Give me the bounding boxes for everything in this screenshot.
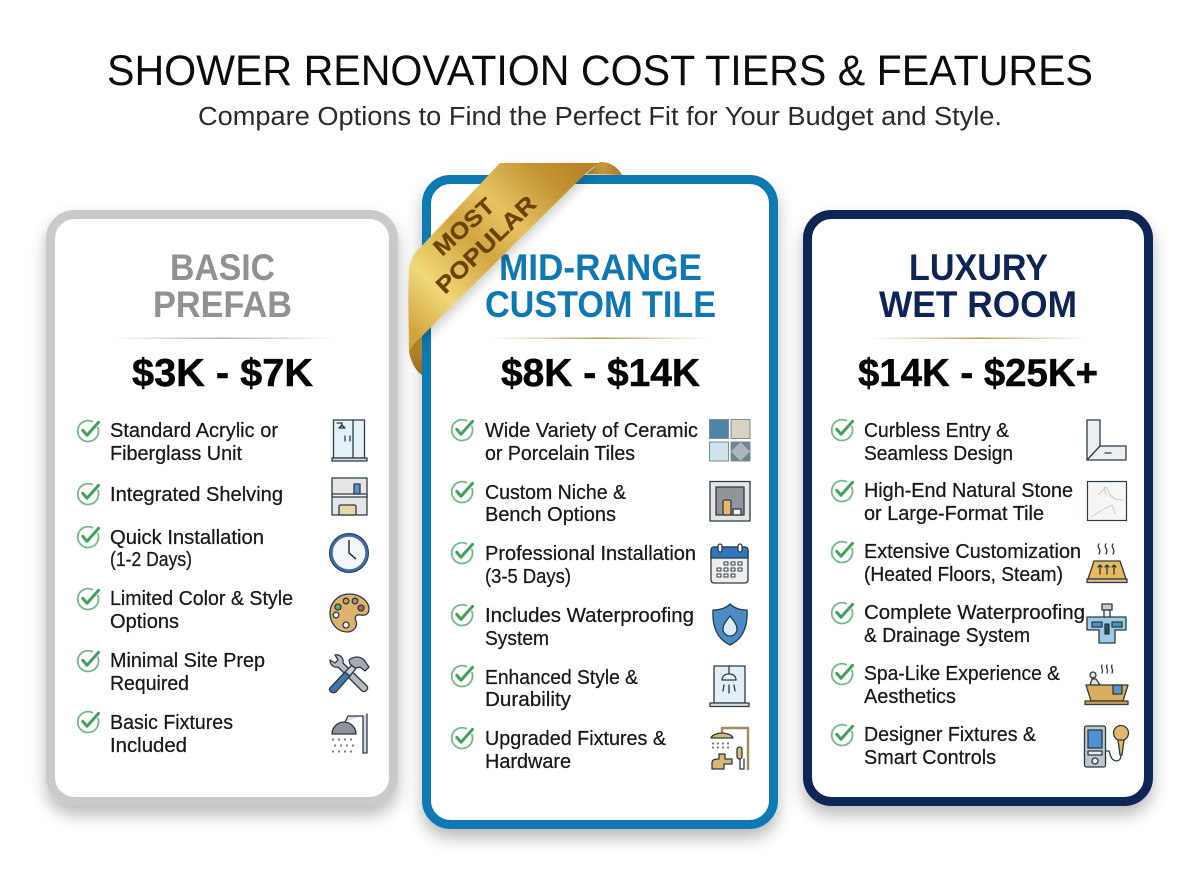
feature: enhanced style — [452, 666, 639, 711]
icon: shield — [713, 604, 747, 645]
feature: integrated shelving: Integrated Shelving — [110, 484, 283, 506]
ribbon text: MOST — [428, 193, 500, 261]
feature: natural stone: or Large-Format Tile — [864, 503, 1044, 525]
icon: spa tub — [1085, 665, 1128, 704]
feature: complete waterproofing: & Drainage System — [864, 625, 1030, 647]
feature: limited color — [78, 588, 293, 633]
ribbon top fold — [573, 162, 622, 186]
icon: shower head — [332, 714, 367, 753]
heading: basic prefab: PREFAB — [153, 284, 292, 325]
feature: waterproofing: Includes Waterproofing — [485, 605, 694, 627]
icon: heated floor — [1087, 544, 1127, 582]
heading: mid-range custom tile: MID-RANGE — [499, 247, 702, 288]
feature: upgraded fixtures — [452, 728, 667, 773]
feature: enhanced style: Durability — [485, 689, 571, 711]
feature: standard acrylic — [78, 420, 278, 465]
title: SHOWER RENOVATION COST TIERS & FEATURES — [107, 47, 1093, 95]
icon: curbless corner — [1087, 420, 1126, 460]
price: basic: $3K - $7K — [132, 352, 313, 395]
feature: upgraded fixtures: Hardware — [485, 751, 571, 773]
heading: mid-range custom tile: CUSTOM TILE — [485, 284, 716, 325]
feature: waterproofing — [452, 605, 694, 650]
feature: custom niche: Custom Niche & — [485, 482, 627, 504]
feature: complete waterproofing — [832, 602, 1085, 647]
feature: ceramic tiles: Wide Variety of Ceramic — [485, 420, 698, 442]
icon: glass shower — [710, 666, 749, 706]
feature: quick installation — [78, 527, 264, 571]
feature: curbless entry — [832, 420, 1013, 465]
feature: basic fixtures: Included — [110, 735, 187, 757]
heading: luxury wet room: WET ROOM — [879, 284, 1077, 325]
icon: shelving — [332, 478, 367, 515]
panel: luxury wet room — [808, 214, 1148, 802]
icon: smart controls — [1084, 726, 1128, 767]
icon: tools — [329, 655, 369, 693]
feature: basic fixtures — [78, 712, 233, 757]
heading: basic prefab: BASIC — [170, 247, 275, 288]
feature: designer fixtures: Smart Controls — [864, 747, 996, 769]
feature: minimal site prep: Minimal Site Prep — [110, 650, 265, 672]
heading: basic prefab — [153, 247, 292, 325]
feature: minimal site prep: Required — [110, 673, 189, 695]
heading: luxury wet room — [879, 247, 1077, 325]
icon: drain — [1087, 604, 1126, 643]
feature: upgraded fixtures: Upgraded Fixtures & — [485, 728, 667, 750]
panel: mid-range custom tile — [426, 180, 774, 824]
feature: custom niche: Bench Options — [485, 504, 616, 526]
feature: natural stone — [832, 480, 1073, 525]
feature: curbless entry: Curbless Entry & — [864, 420, 1010, 442]
feature: designer fixtures: Designer Fixtures & — [864, 724, 1037, 746]
feature: spa-like — [832, 663, 1061, 708]
icon: tile swatches — [710, 420, 750, 461]
feature: professional installation: Professional Installation — [485, 543, 696, 565]
feature: limited color: Limited Color & Style — [110, 588, 293, 610]
feature: minimal site prep — [78, 650, 265, 695]
feature: ceramic tiles: or Porcelain Tiles — [485, 443, 635, 465]
icon: palette — [330, 594, 369, 632]
price: luxury: $14K - $25K+ — [858, 352, 1098, 395]
feature: professional installation — [452, 543, 696, 588]
feature: custom niche — [452, 482, 627, 526]
feature: quick installation: Quick Installation — [110, 527, 264, 549]
feature: enhanced style: Enhanced Style & — [485, 667, 639, 689]
feature: spa-like: Spa-Like Experience & — [864, 663, 1061, 685]
feature: complete waterproofing: Complete Waterproofing — [864, 602, 1085, 624]
ribbon text: POPULAR — [430, 190, 542, 299]
feature: professional installation: (3-5 Days) — [485, 566, 571, 588]
panel frame: luxury — [808, 214, 1148, 802]
feature: quick installation: (1-2 Days) — [110, 549, 192, 571]
heading: luxury wet room: LUXURY — [909, 247, 1048, 288]
icon: shower cabin — [332, 420, 367, 461]
feature: ceramic tiles — [452, 420, 698, 465]
icon: calendar — [711, 544, 748, 583]
ribbon band — [409, 163, 600, 352]
feature: natural stone: High-End Natural Stone — [864, 480, 1073, 502]
feature: curbless entry: Seamless Design — [864, 443, 1013, 465]
panel frame: basic — [50, 214, 394, 802]
subtitle: Compare Options to Find the Perfect Fit for Your Budget and Style. — [198, 103, 1002, 131]
feature: extensive customization — [832, 541, 1081, 586]
feature: extensive customization: Extensive Customization — [864, 541, 1081, 563]
feature: designer fixtures — [832, 724, 1037, 769]
feature: standard acrylic: Fiberglass Unit — [110, 443, 242, 465]
heading: mid-range custom tile — [485, 247, 716, 325]
ribbon: most popular — [409, 162, 622, 375]
feature: spa-like: Aesthetics — [864, 686, 956, 708]
feature: standard acrylic: Standard Acrylic or — [110, 420, 278, 442]
icon: gold fixtures — [711, 728, 748, 769]
feature: basic fixtures: Basic Fixtures — [110, 712, 233, 734]
panel frame: mid-range — [426, 180, 774, 824]
icon: niche — [710, 482, 750, 521]
icon: marble tile — [1088, 482, 1126, 520]
panel: basic prefab — [50, 214, 394, 802]
ribbon tail fold — [409, 275, 422, 375]
feature: waterproofing: System — [485, 628, 549, 650]
feature: limited color: Options — [110, 611, 179, 633]
feature: extensive customization: (Heated Floors, Steam) — [864, 564, 1063, 586]
icon: clock — [330, 534, 368, 572]
price: mid-range: $8K - $14K — [501, 352, 700, 395]
